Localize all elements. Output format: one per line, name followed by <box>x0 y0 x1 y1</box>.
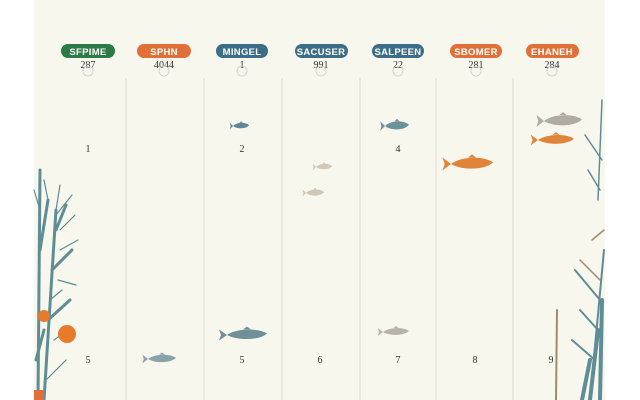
header numbers: 991 <box>314 60 328 71</box>
fish <box>142 112 582 363</box>
column numbers: 7 <box>396 355 400 366</box>
header pills: SBOMER <box>454 47 498 58</box>
header pills: SPHN <box>150 47 178 58</box>
header pills: EHANEH <box>531 47 573 58</box>
column numbers: 2 <box>240 144 244 155</box>
header numbers: 284 <box>544 60 560 71</box>
right reeds <box>556 100 604 400</box>
header numbers <box>80 60 560 76</box>
header numbers: 1 <box>240 60 244 71</box>
header pills: SFPIME <box>69 47 107 58</box>
column numbers: 1 <box>86 144 90 155</box>
header pills: SACUSER <box>297 47 345 58</box>
header numbers: 4044 <box>154 60 174 71</box>
column numbers: 5 <box>86 355 90 366</box>
left reeds <box>34 170 78 400</box>
header numbers: 287 <box>80 60 96 71</box>
column numbers: 6 <box>318 355 322 366</box>
column numbers: 8 <box>472 355 478 366</box>
column numbers: 4 <box>396 144 400 155</box>
header numbers: 281 <box>468 60 484 71</box>
column numbers: 5 <box>240 355 244 366</box>
header pills <box>61 44 579 58</box>
header pills: SALPEEN <box>375 47 421 58</box>
header numbers: 22 <box>393 60 403 71</box>
column numbers <box>86 144 554 366</box>
column numbers: 9 <box>548 355 554 366</box>
header pills: MINGEL <box>223 47 261 58</box>
